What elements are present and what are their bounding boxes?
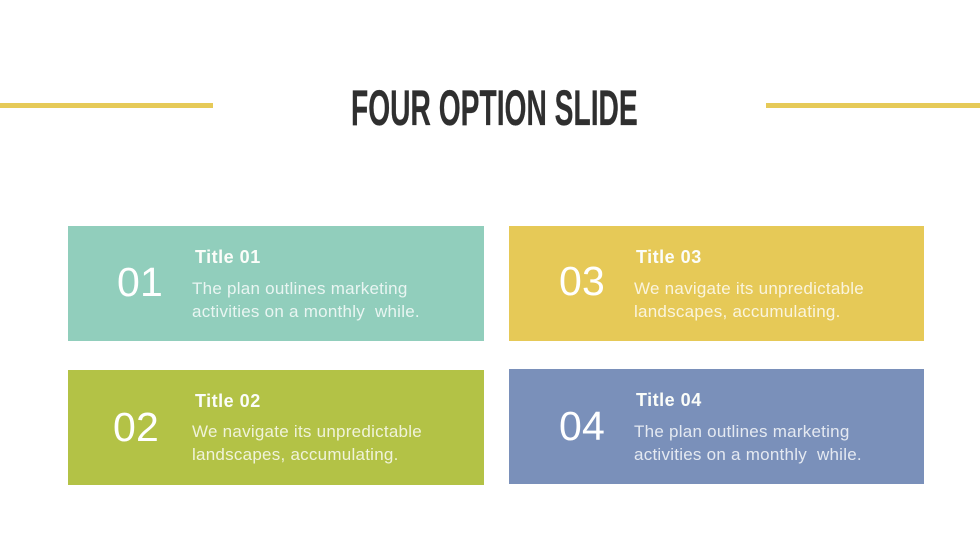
- text: option 01 description: The plan outlines marketing activities on a monthly while.: [192, 279, 420, 321]
- heading: Title 03: Title 03: [636, 247, 702, 267]
- heading: Title 01: Title 01: [195, 247, 261, 267]
- text: option 04 description: The plan outlines marketing activities on a monthly while.: [634, 422, 862, 464]
- number 01: 01: [117, 259, 163, 305]
- title: FOUR OPTION SLIDE: [351, 80, 638, 136]
- panel: option 01: [68, 226, 484, 341]
- heading: Title 02: Title 02: [195, 391, 261, 411]
- number 02: 02: [113, 404, 159, 450]
- panel: option 03: [509, 226, 924, 341]
- text: option 02 description: We navigate its unpredictable landscapes, accumulating.: [192, 422, 422, 464]
- panel: option 04: [509, 369, 924, 484]
- text: option 03 description: We navigate its unpredictable landscapes, accumulating.: [634, 279, 864, 321]
- panel: option 02: [68, 370, 484, 485]
- heading: Title 04: Title 04: [636, 390, 702, 410]
- number 04: 04: [559, 403, 605, 449]
- left accent line: [0, 103, 213, 108]
- number 03: 03: [559, 258, 605, 304]
- right accent line: [766, 103, 980, 108]
